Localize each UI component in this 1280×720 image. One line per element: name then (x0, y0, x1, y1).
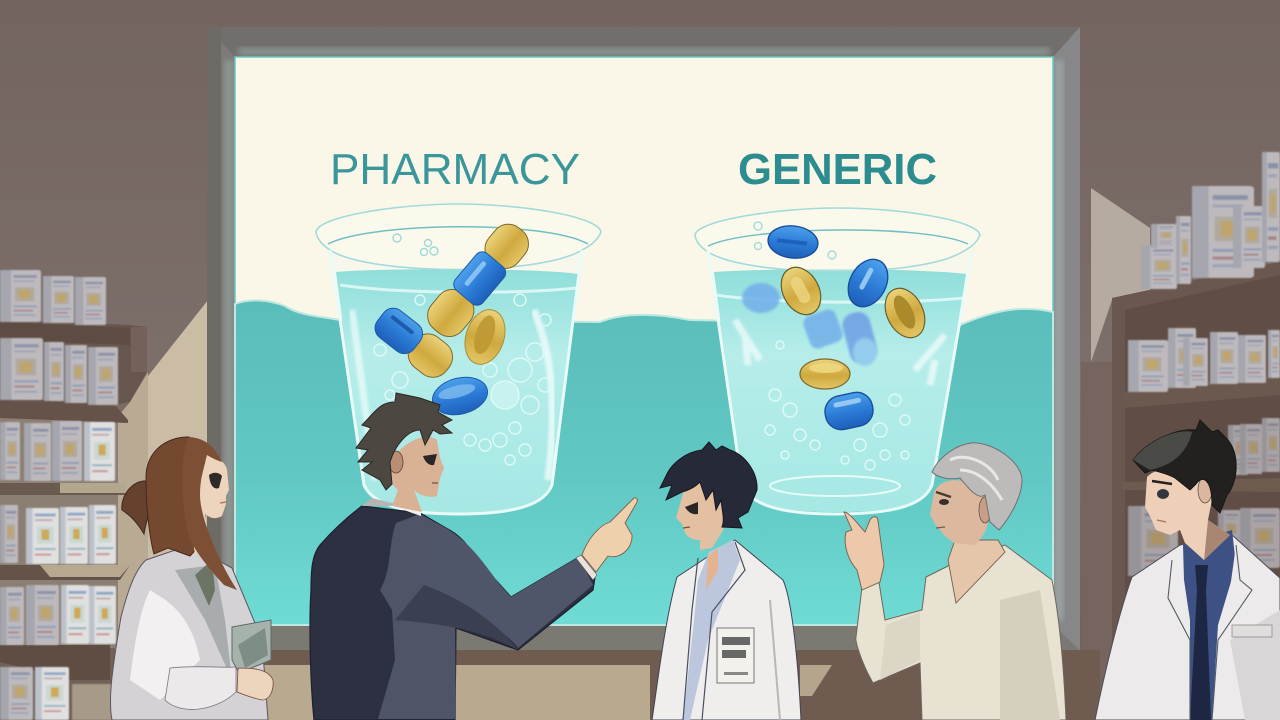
boxes: row 3 (0, 421, 115, 481)
shirt (1183, 530, 1236, 720)
boxes: lower (1128, 418, 1280, 576)
panel: left glass (316, 204, 601, 514)
tie (1190, 565, 1211, 720)
neck (948, 540, 1005, 603)
pill: gold oval (458, 304, 512, 370)
pill: blue oval (428, 372, 492, 420)
window frame (207, 27, 1080, 650)
pill: faded blue pills (742, 283, 880, 367)
heading: PHARMACY: PHARMACY (330, 145, 580, 194)
collar (362, 498, 421, 516)
pill: blue gold capsule (369, 302, 459, 384)
water band (235, 300, 1053, 625)
pill: gold right (877, 282, 933, 344)
boxes: row 6 (0, 667, 122, 720)
boxes: top (1141, 152, 1280, 289)
ponytail (122, 481, 152, 534)
hair (356, 393, 452, 490)
hair front (182, 437, 237, 590)
right shelf (1112, 152, 1280, 720)
coat (652, 540, 801, 720)
panel: display screen with water (235, 57, 1053, 625)
pill: gold blue gold capsule (421, 217, 536, 343)
neck and face (1145, 468, 1230, 560)
shirt cuff (576, 555, 597, 580)
pill: blue top (766, 223, 820, 261)
coat (1095, 535, 1280, 720)
pill: gold one (773, 260, 829, 322)
hair (932, 443, 1022, 530)
pill: blue lower (822, 389, 876, 433)
hair (660, 442, 757, 528)
boxes: row 2 (0, 338, 118, 405)
neck and face (388, 437, 444, 512)
heading: GENERIC: GENERIC (738, 145, 937, 194)
boxes: row 5 (0, 585, 116, 645)
hand (582, 498, 637, 572)
face (190, 455, 229, 555)
face (930, 480, 988, 545)
boxes: middle (1128, 328, 1280, 392)
lit side of the suit (378, 514, 456, 719)
hair back (146, 437, 205, 556)
person: man in lab coat centre (652, 442, 801, 720)
book (232, 620, 271, 673)
boxes: row 4 (0, 505, 116, 564)
lapels (1168, 545, 1252, 720)
shirt (683, 540, 740, 720)
sweater and arm (856, 545, 1066, 720)
person: man in dark suit pointing (310, 393, 637, 720)
lapels (683, 542, 745, 720)
face (676, 480, 730, 550)
coat (110, 545, 268, 720)
panel: right glass (695, 208, 980, 514)
suit body and arm (310, 506, 595, 720)
wall below window (240, 650, 1100, 720)
bubbles (754, 222, 910, 470)
hand (844, 512, 884, 590)
person: woman with ponytail (110, 437, 273, 720)
person: grey haired man (844, 443, 1066, 720)
boxes: row 1 (0, 270, 106, 325)
pill: blue right (840, 252, 896, 314)
left shelf (0, 270, 147, 720)
pill: gold lower (800, 359, 850, 389)
person: man in lab coat with blue shirt and tie (1095, 420, 1280, 720)
bubbles (374, 234, 552, 465)
eye (209, 473, 222, 488)
hair (1133, 420, 1236, 513)
hand (237, 668, 273, 700)
badge (717, 628, 754, 683)
